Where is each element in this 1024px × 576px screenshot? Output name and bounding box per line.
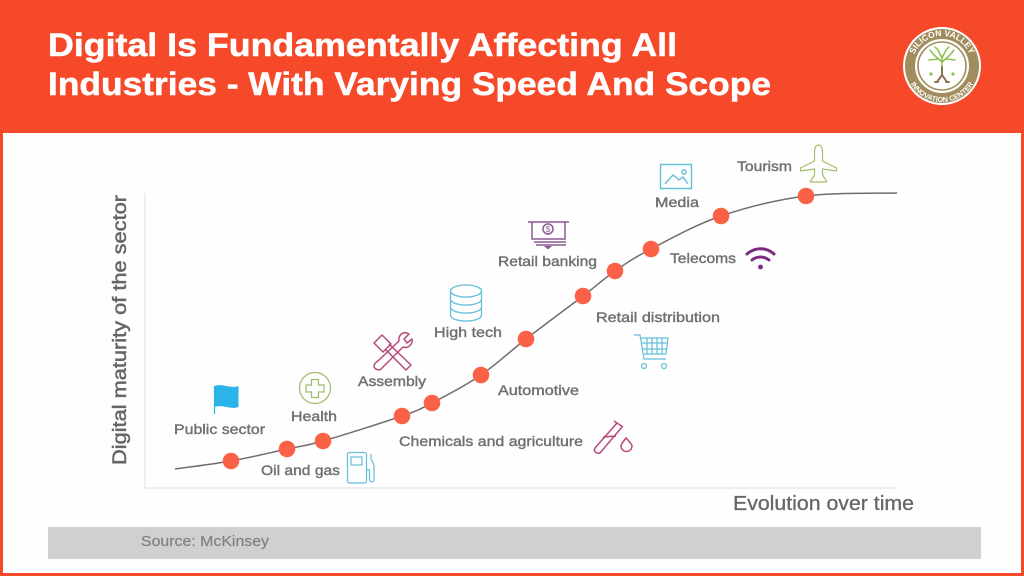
curve data points	[223, 188, 814, 469]
icon: shopping cart	[634, 335, 668, 368]
source bar	[48, 527, 981, 559]
icon: database	[450, 285, 482, 321]
title	[48, 27, 771, 102]
label: Public sector: Public sector	[174, 421, 265, 437]
icon: ATM cash: $	[546, 225, 551, 234]
s-curve line	[175, 193, 897, 469]
label: High tech: High tech	[434, 324, 502, 340]
logo: Silicon Valley Innovation Center: SILICON VALLEY	[910, 30, 975, 54]
label: Assembly: Assembly	[358, 373, 426, 389]
icon: picture	[660, 164, 692, 188]
panel: white content area	[3, 133, 1021, 573]
label: Retail banking: Retail banking	[498, 253, 597, 269]
label: Oil and gas: Oil and gas	[261, 462, 340, 478]
chart axes	[145, 193, 897, 488]
icon: airplane	[800, 145, 836, 182]
y axis label: Digital maturity of the sector	[110, 194, 131, 465]
icon: wifi	[747, 249, 774, 269]
icon: hammer and wrench	[374, 333, 412, 370]
icon: fuel pump	[348, 452, 374, 483]
x axis label: Evolution over time	[733, 493, 914, 515]
label: Tourism: Tourism	[737, 158, 792, 174]
source text: Source: McKinsey	[141, 533, 270, 550]
title: Industries - With Varying Speed And Scope	[48, 66, 771, 102]
icon: health cross	[300, 372, 330, 404]
icon: test tube and drop	[594, 421, 632, 453]
logo: Silicon Valley Innovation Center	[903, 27, 981, 105]
title: Digital Is Fundamentally Affecting All	[48, 27, 677, 63]
label: Automotive: Automotive	[498, 382, 579, 398]
icon: flag	[214, 385, 238, 414]
label: Health: Health	[291, 408, 337, 424]
label: Retail distribution: Retail distribution	[596, 309, 720, 325]
logo: Silicon Valley Innovation Center: INNOVATION CENTER	[911, 82, 974, 102]
label: Telecoms: Telecoms	[670, 250, 736, 266]
label: Chemicals and agriculture: Chemicals and agriculture	[399, 433, 583, 449]
label: Media: Media	[655, 194, 699, 210]
icon: ATM cash	[528, 222, 569, 250]
